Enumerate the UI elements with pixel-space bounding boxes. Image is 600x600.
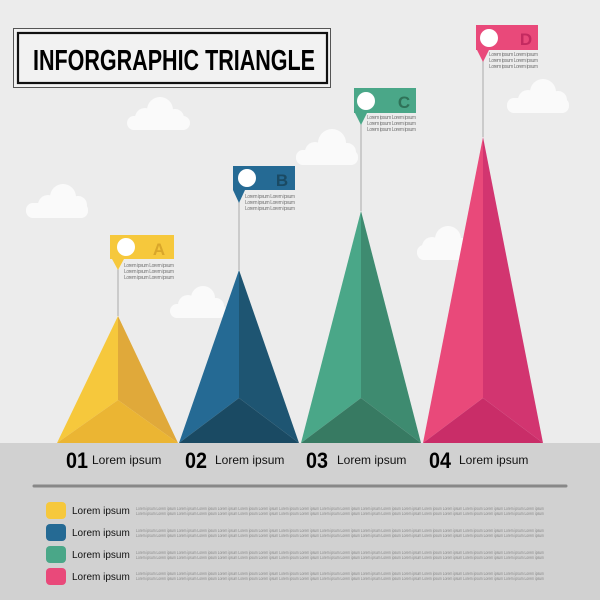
flag B: B xyxy=(276,171,288,190)
triangle 3 green xyxy=(301,118,421,443)
numbered labels: 02 xyxy=(185,448,207,473)
flag B xyxy=(233,166,295,212)
numbered labels: 04 xyxy=(429,448,452,473)
title xyxy=(14,28,330,88)
flag C: Lorem ipsum Lorem ipsum xyxy=(367,115,416,121)
legend: Lorem ipsum xyxy=(72,572,130,583)
flag A: Lorem ipsum Lorem ipsum xyxy=(124,269,174,275)
flag C: C xyxy=(398,93,410,112)
legend xyxy=(46,502,544,585)
numbered labels: Lorem ipsum xyxy=(337,453,406,467)
triangle 4 pink xyxy=(423,55,543,443)
flag B: Lorem ipsum Lorem ipsum xyxy=(245,194,295,200)
numbered labels: 01 xyxy=(66,448,88,473)
flag C: Lorem ipsum Lorem ipsum xyxy=(367,127,416,133)
flag D xyxy=(476,25,538,70)
clouds xyxy=(26,79,569,318)
flag D: Lorem ipsum Lorem ipsum xyxy=(489,58,538,64)
flag A xyxy=(110,235,174,281)
flag C: Lorem ipsum Lorem ipsum xyxy=(367,121,416,127)
flag D: Lorem ipsum Lorem ipsum xyxy=(489,64,538,70)
numbered labels xyxy=(66,448,528,473)
title: INFORGRAPHIC TRIANGLE xyxy=(33,45,315,77)
triangle 2 blue xyxy=(179,195,299,443)
flag A: A xyxy=(153,240,165,259)
legend: Lorem ipsum xyxy=(72,550,130,561)
legend: Lorem ipsum xyxy=(72,506,130,517)
numbered labels: Lorem ipsum xyxy=(215,453,284,467)
legend: Lorem ipsum xyxy=(72,528,130,539)
flag A: Lorem ipsum Lorem ipsum xyxy=(124,263,174,269)
flag B: Lorem ipsum Lorem ipsum xyxy=(245,206,295,212)
triangle 1 yellow xyxy=(57,262,178,443)
flag D: D xyxy=(520,30,532,49)
flag B: Lorem ipsum Lorem ipsum xyxy=(245,200,295,206)
numbered labels: Lorem ipsum xyxy=(92,453,161,467)
flag C xyxy=(354,88,416,133)
flag D: Lorem ipsum Lorem ipsum xyxy=(489,52,538,58)
numbered labels: Lorem ipsum xyxy=(459,453,528,467)
flag A: Lorem ipsum Lorem ipsum xyxy=(124,275,174,281)
numbered labels: 03 xyxy=(306,448,328,473)
